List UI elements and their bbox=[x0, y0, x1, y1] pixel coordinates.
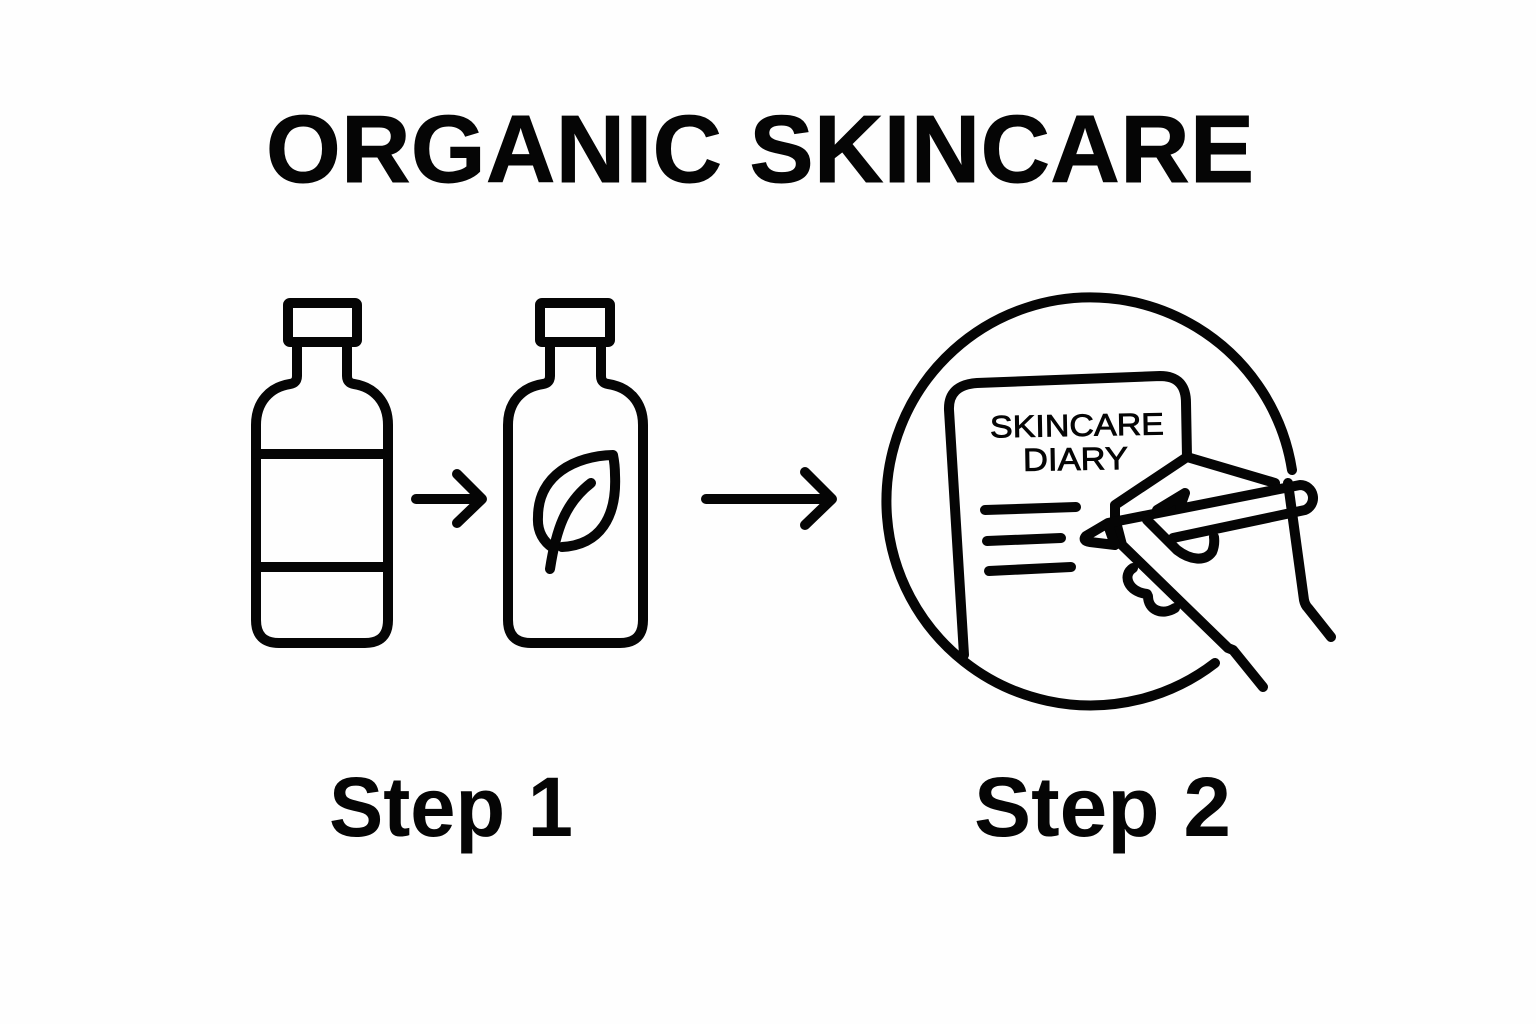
fingers bbox=[1128, 493, 1214, 612]
diary heading: DIARY bbox=[1023, 440, 1128, 478]
icon: circle with skincare diary and writing hand bbox=[886, 297, 1331, 705]
arrow: between bottles bbox=[416, 474, 482, 523]
icon: plain bottle bbox=[256, 303, 388, 643]
title: ORGANIC SKINCARE bbox=[266, 96, 1254, 203]
pen bbox=[1085, 485, 1313, 545]
icon: leaf bbox=[538, 455, 615, 569]
diary page bbox=[949, 376, 1187, 655]
icon: organic bottle with leaf bbox=[508, 303, 643, 643]
diary heading: SKINCARE bbox=[990, 406, 1164, 444]
circle bbox=[886, 297, 1292, 705]
arrow: to step 2 bbox=[706, 472, 832, 525]
hand outline bbox=[1115, 457, 1275, 687]
label: step 1: Step 1 bbox=[329, 760, 573, 854]
diary text lines bbox=[985, 507, 1076, 571]
diary heading bbox=[990, 406, 1164, 478]
label: step 2: Step 2 bbox=[974, 760, 1231, 854]
